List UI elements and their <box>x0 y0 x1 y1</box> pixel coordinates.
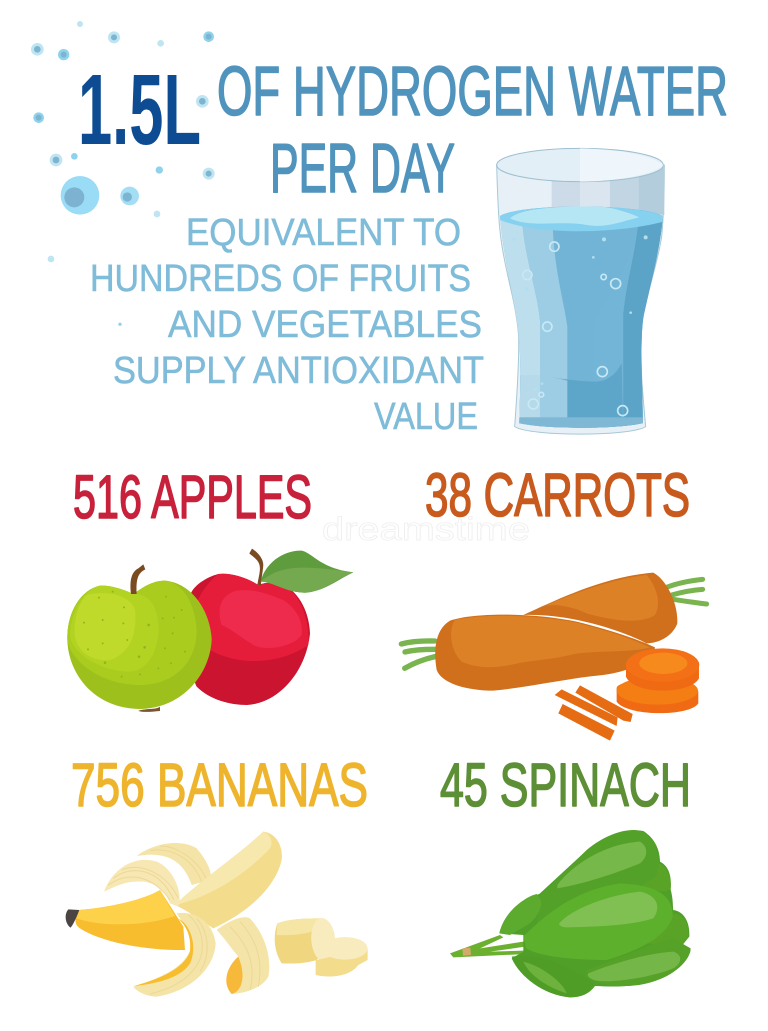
bottom right leaf <box>587 938 691 986</box>
leaf mass base <box>499 830 691 997</box>
left leaf <box>499 894 541 935</box>
front peel <box>133 913 216 997</box>
icon: banana <box>66 832 368 997</box>
back peel top <box>137 843 211 885</box>
subtitle text block <box>90 212 484 438</box>
green apple <box>67 564 212 712</box>
leaf <box>261 551 353 593</box>
top leaf <box>537 830 659 927</box>
water body <box>500 206 663 428</box>
amount: 1.5L: 1.5L <box>78 54 201 166</box>
banana fruit body <box>75 890 185 950</box>
peeled banana flesh <box>175 832 282 928</box>
front carrot <box>435 615 655 691</box>
left peel <box>104 860 180 907</box>
icon: carrots <box>401 573 707 741</box>
carrot slices <box>617 648 699 713</box>
back leaves <box>640 862 671 892</box>
subtitle text block: VALUE <box>374 396 478 438</box>
carrot sticks <box>555 685 633 741</box>
subtitle text block: EQUIVALENT TO <box>186 212 461 254</box>
watermark: dreamstime <box>322 511 530 547</box>
back peel right <box>217 917 269 994</box>
title: PER DAY <box>270 129 455 207</box>
stems <box>450 935 527 957</box>
subtitle text block: SUPPLY ANTIOXIDANT <box>113 350 484 392</box>
label: 756 bananas: 756 BANANAS <box>71 751 368 819</box>
carrot greens right <box>667 579 707 604</box>
banana slices <box>275 918 335 964</box>
title <box>217 52 728 207</box>
banana tip <box>66 909 79 928</box>
label: 516 apples: 516 APPLES <box>73 463 312 531</box>
subtitle text block: AND VEGETABLES <box>168 304 482 346</box>
icon: spinach <box>450 830 691 997</box>
back carrot <box>523 573 677 643</box>
decorative water bubbles <box>31 21 215 326</box>
bottom left leaf <box>512 956 593 997</box>
subtitle text block: HUNDREDS OF FRUITS <box>90 258 471 300</box>
centre leaf <box>523 883 673 960</box>
red apple <box>191 549 310 705</box>
icon: apples <box>67 549 353 712</box>
icon: glass of water <box>493 148 667 434</box>
carrot greens left <box>401 641 435 668</box>
